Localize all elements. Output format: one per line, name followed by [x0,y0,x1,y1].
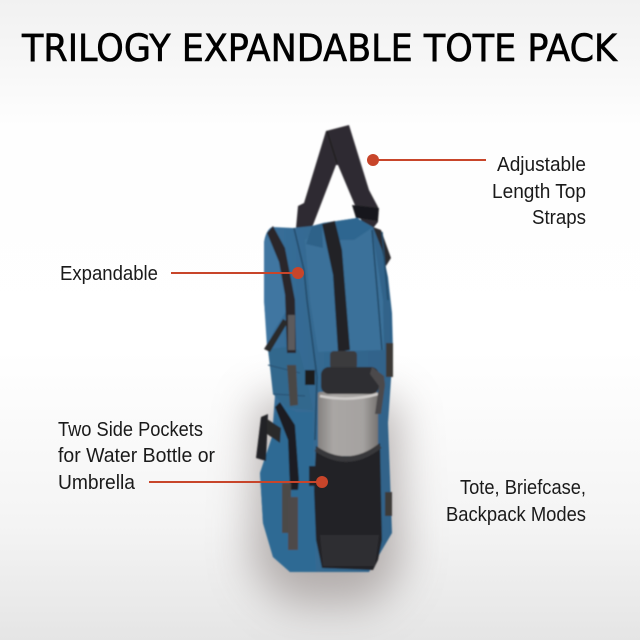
middle pocket [268,347,313,410]
label: two side pockets: for Water Bottle or [58,445,215,467]
label: two side pockets: Two Side Pockets [58,419,203,441]
label: expandable: Expandable [60,263,158,285]
mesh pocket [314,443,382,570]
bag body [260,218,393,572]
label: adjustable length top straps: Adjustable [497,154,586,176]
label: two side pockets [58,419,215,494]
callout: expandable [171,267,304,279]
label: modes [446,477,586,526]
left side panel [264,236,287,347]
black left binding [267,226,296,353]
callout: side pockets [149,476,328,488]
backpack illustration [256,125,393,572]
callout: adjustable straps [367,154,486,166]
zipper pulls [256,315,393,550]
label: modes: Tote, Briefcase, [460,477,586,499]
top strap handle [296,125,391,266]
lower pocket panel [260,403,316,572]
upper panel highlight [305,218,384,352]
zipper seams [294,228,388,440]
water bottle [318,351,385,456]
top flap shadow [306,224,323,248]
bag shadow [252,400,402,605]
label: modes: Backpack Modes [446,504,586,526]
label: adjustable length top straps: Straps [532,207,586,229]
black centre band [322,221,350,352]
lower black binding [275,402,299,490]
label: adjustable length top straps: Length Top [492,181,586,203]
title: TRILOGY EXPANDABLE TOTE PACK [21,27,619,70]
label: two side pockets: Umbrella [58,472,136,494]
label: adjustable length top straps [492,154,586,229]
